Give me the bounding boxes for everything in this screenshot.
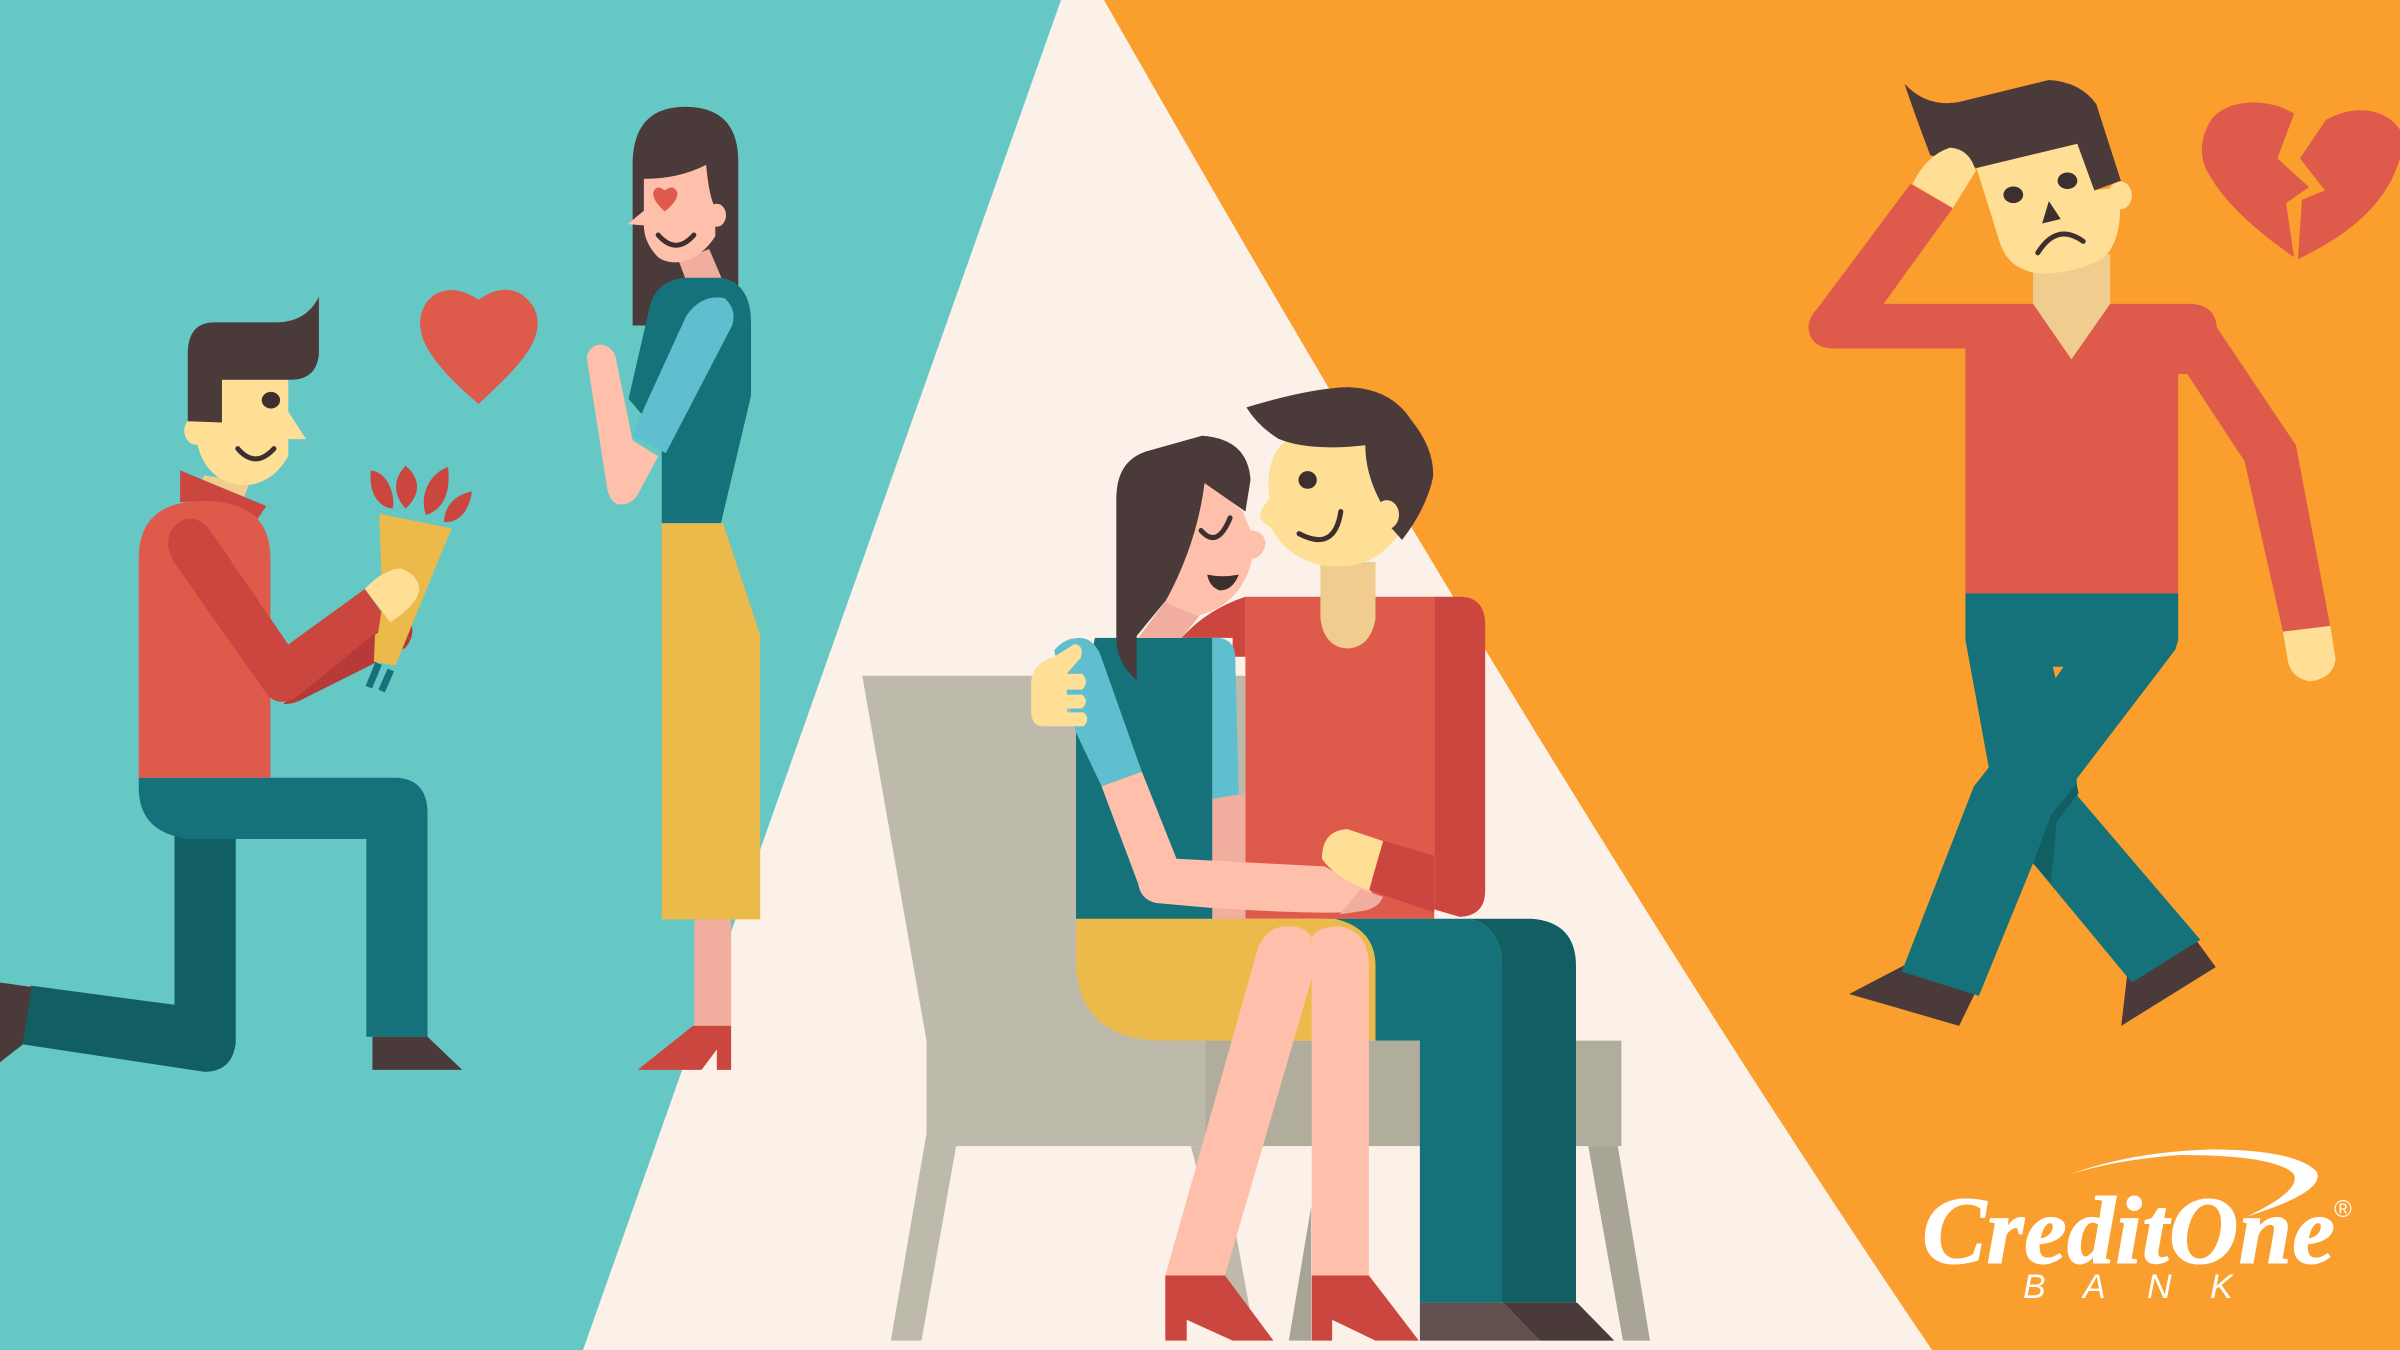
smile bbox=[1299, 512, 1341, 540]
front arm bbox=[168, 519, 389, 702]
forearm and hand bbox=[587, 345, 658, 504]
far thigh and shin bbox=[1470, 919, 1576, 1303]
hair bbox=[1116, 436, 1251, 680]
raised hand bbox=[1912, 148, 1976, 208]
neck bbox=[202, 475, 250, 498]
near thigh and shin bbox=[1324, 919, 1502, 1303]
trouser fold bbox=[2033, 783, 2079, 882]
torso bbox=[1245, 597, 1434, 919]
shoe bbox=[638, 1026, 731, 1070]
ear bbox=[2108, 181, 2132, 209]
frown bbox=[2038, 234, 2083, 253]
standing woman bbox=[587, 107, 760, 1070]
far shoe bbox=[1503, 1303, 1614, 1341]
sad man bbox=[1808, 80, 2336, 1026]
bouquet bbox=[369, 466, 472, 691]
heart eye bbox=[653, 187, 678, 211]
torso bbox=[139, 501, 270, 778]
man seated bbox=[1182, 387, 1614, 1341]
figures: couple on bench bbox=[862, 387, 1650, 1341]
hair bbox=[1246, 387, 1433, 540]
figures: heartbroken scene bbox=[1808, 80, 2400, 1026]
ear bbox=[708, 204, 726, 227]
right eye bbox=[2058, 172, 2077, 189]
seat bbox=[1206, 1041, 1621, 1146]
skirt bbox=[1076, 919, 1376, 1041]
neck bbox=[1320, 562, 1376, 649]
broken heart bbox=[2202, 103, 2400, 259]
bank subline: BANK bbox=[2023, 1268, 2234, 1306]
flower petals bbox=[370, 466, 472, 522]
neck bbox=[1138, 600, 1202, 638]
trouser gap bbox=[2053, 667, 2064, 678]
wrap bottom bbox=[374, 606, 414, 666]
ear bbox=[1374, 500, 1399, 529]
leg bbox=[694, 919, 731, 1028]
far sleeve bbox=[1212, 638, 1239, 799]
face bbox=[1260, 436, 1406, 566]
collar bbox=[180, 470, 266, 519]
shoes bbox=[1849, 933, 2216, 1026]
face bbox=[1977, 144, 2120, 273]
arm around man bbox=[1102, 772, 1374, 913]
near sleeve bbox=[1054, 638, 1142, 786]
registered mark: ® bbox=[2334, 1196, 2352, 1223]
woman seated bbox=[1054, 436, 1419, 1341]
mouth bbox=[1207, 575, 1239, 590]
top bbox=[629, 278, 751, 523]
other leg bbox=[1312, 926, 1369, 1276]
man's sleeve bbox=[1370, 840, 1434, 912]
back arm bbox=[283, 622, 412, 704]
background: teal panel bbox=[0, 0, 1061, 1350]
face bbox=[196, 380, 306, 485]
wrap top bbox=[374, 514, 452, 666]
right leg bbox=[1588, 1146, 1650, 1341]
nose bbox=[2042, 201, 2061, 223]
lowered hand bbox=[2283, 626, 2336, 681]
backrest and front leg bbox=[862, 676, 1245, 1341]
eye bbox=[262, 392, 280, 408]
hair bbox=[188, 297, 319, 422]
logo bbox=[1922, 1149, 2352, 1306]
left eye bbox=[2003, 186, 2023, 203]
wordmark: CreditOne bbox=[1922, 1177, 2335, 1284]
heart bbox=[420, 290, 538, 404]
back leg bbox=[23, 833, 236, 1072]
crossed leg bbox=[1165, 926, 1312, 1276]
near shoe bbox=[1420, 1303, 1540, 1341]
closed eye bbox=[1201, 518, 1230, 538]
smile bbox=[658, 235, 694, 245]
bench bbox=[862, 676, 1650, 1341]
stems bbox=[369, 664, 391, 691]
logo swoosh bbox=[2068, 1149, 2318, 1217]
neck bbox=[679, 249, 722, 281]
man's hand on shoulder bbox=[1031, 644, 1087, 726]
man's hand on lap bbox=[1322, 829, 1383, 890]
back arm bbox=[1212, 796, 1245, 919]
front leg bbox=[139, 778, 428, 1037]
figures: proposal scene bbox=[0, 107, 760, 1072]
back arm bbox=[1182, 597, 1245, 657]
trousers bbox=[1902, 593, 2200, 996]
neck bbox=[2033, 254, 2110, 359]
face bbox=[628, 165, 715, 262]
front shoe bbox=[372, 1037, 462, 1070]
back shoe bbox=[0, 982, 32, 1062]
face bbox=[1166, 483, 1266, 616]
hair back bbox=[633, 107, 738, 326]
top bbox=[1076, 638, 1212, 919]
middle leg bbox=[1191, 1146, 1251, 1313]
side and sleeve bbox=[1434, 597, 1485, 917]
hand bbox=[365, 569, 419, 622]
smile bbox=[238, 449, 274, 459]
shoes bbox=[1165, 1276, 1419, 1341]
kneeling man bbox=[0, 297, 472, 1072]
eye bbox=[1298, 471, 1317, 489]
sleeve bbox=[633, 297, 734, 453]
background: orange panel bbox=[1104, 0, 2400, 1350]
sweater with arms bbox=[1808, 184, 2330, 632]
hair bbox=[1905, 80, 2121, 190]
far legs bbox=[1289, 1206, 1311, 1341]
skirt bbox=[662, 523, 760, 919]
ear bbox=[184, 417, 209, 445]
hand shade bbox=[1340, 889, 1383, 914]
